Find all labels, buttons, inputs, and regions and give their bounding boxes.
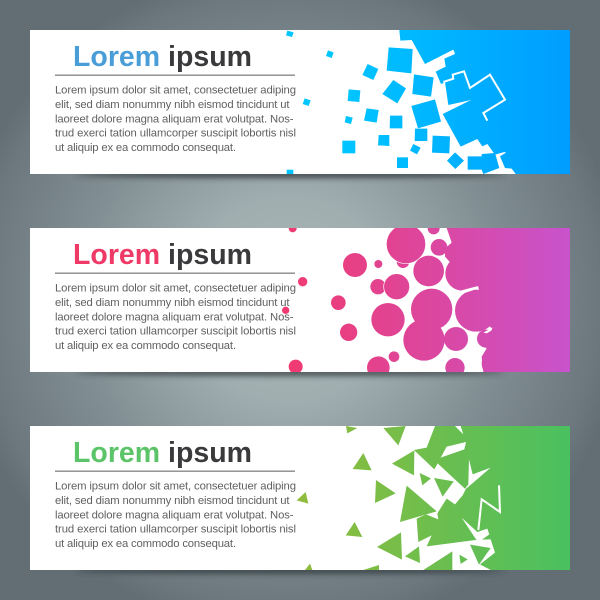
text block: green banner: laoreet dolore magna aliquam erat volutpat. Nos- — [55, 509, 294, 521]
heading: green banner: Lorem ipsum — [73, 437, 252, 469]
text block: pink banner: elit, sed diam nonummy nibh eismod tincidunt ut — [55, 297, 290, 309]
heading: pink banner: Lorem ipsum — [73, 239, 252, 271]
text block: blue banner: elit, sed diam nonummy nibh eismod tincidunt ut — [55, 99, 290, 111]
text block: blue banner — [55, 84, 296, 154]
graphic: pink circles — [282, 222, 570, 379]
text block: blue banner: laoreet dolore magna aliquam erat volutpat. Nos- — [55, 113, 294, 125]
text block: blue banner: trud exerci tation ullamcorper suscipit lobortis nisl — [55, 128, 296, 140]
graphic: blue squares — [286, 30, 570, 176]
text block: blue banner: Lorem ipsum dolor sit amet, consectetuer adiping — [55, 84, 296, 96]
text block: green banner — [55, 480, 296, 550]
text block: green banner: ut aliquip ex ea commodo consequat. — [55, 538, 236, 550]
text block: pink banner: trud exerci tation ullamcorper suscipit lobortis nisl — [55, 326, 296, 338]
text block: pink banner: Lorem ipsum dolor sit amet, consectetuer adiping — [55, 282, 296, 294]
panel: blue banner — [30, 30, 570, 178]
graphic: green triangles — [297, 426, 491, 570]
text block: pink banner — [55, 282, 296, 352]
panel: green banner — [30, 426, 570, 574]
text block: blue banner: ut aliquip ex ea commodo consequat. — [55, 142, 236, 154]
panel: pink banner — [30, 222, 570, 379]
text block: pink banner: laoreet dolore magna aliquam erat volutpat. Nos- — [55, 311, 294, 323]
graphic: green mass with white cut-outs — [400, 426, 570, 570]
heading: blue banner: Lorem ipsum — [73, 41, 252, 73]
text block: pink banner: ut aliquip ex ea commodo consequat. — [55, 340, 236, 352]
text block: green banner: Lorem ipsum dolor sit amet, consectetuer adiping — [55, 480, 296, 492]
text block: green banner: elit, sed diam nonummy nibh eismod tincidunt ut — [55, 495, 290, 507]
text block: green banner: trud exerci tation ullamcorper suscipit lobortis nisl — [55, 524, 296, 536]
